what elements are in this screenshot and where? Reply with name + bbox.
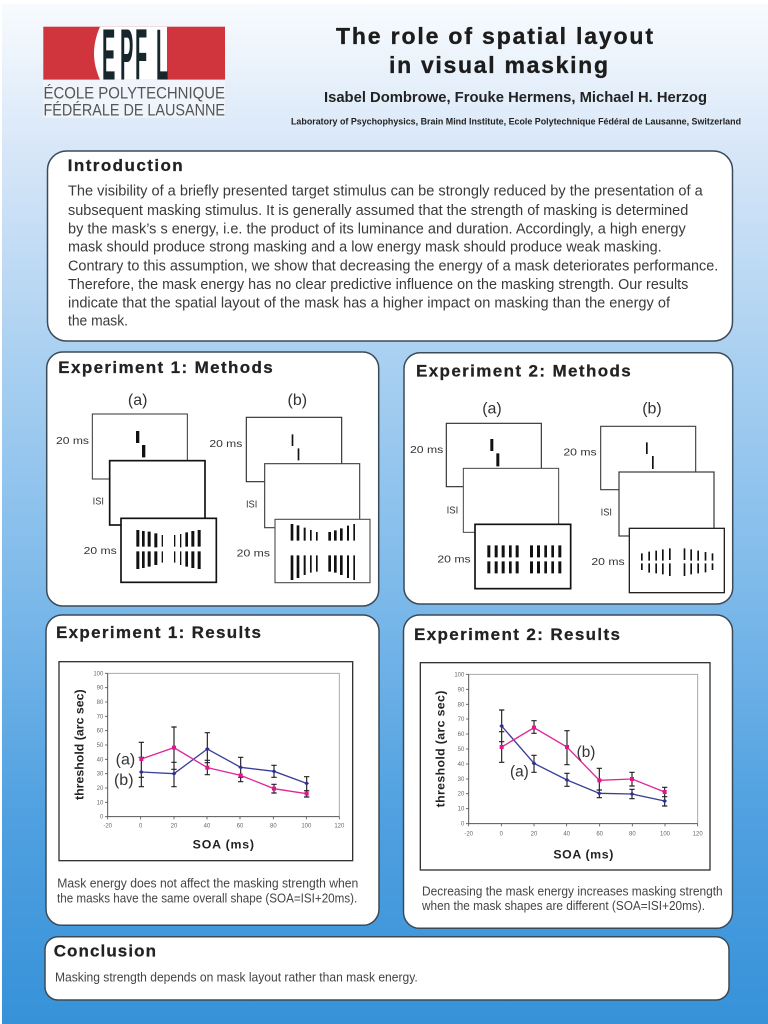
heading: experiment 1 results: Experiment 1: Results <box>56 623 261 642</box>
stimulus sequence (a): 20 ms <box>84 546 117 557</box>
line chart: experiment 1 threshold by SOA: 70 <box>97 714 104 720</box>
line chart: experiment 2 threshold by SOA: 120 <box>693 831 703 837</box>
text: introduction body: the mask. <box>68 314 128 330</box>
line chart: experiment 2 threshold by SOA: 20 <box>531 831 538 837</box>
authors: Isabel Dombrowe, Frouke Hermens, Michael H. Herzog <box>324 90 707 106</box>
diagram: experiment 1 stimuli sequences <box>56 392 370 583</box>
text: introduction body: Therefore, the mask energy has no clear predictive influence on the masking strength. Our results <box>68 277 688 293</box>
caption: experiment 1 results: the masks have the same overall shape (SOA=ISI+20ms). <box>57 891 357 905</box>
text: introduction body: by the mask’s s energy, i.e. the product of its luminance and duration. Accordingly, a high energy <box>68 221 686 237</box>
line chart: experiment 1 threshold by SOA: threshold (arc sec) <box>73 689 87 800</box>
stimulus sequence (b): 20 ms <box>237 549 270 560</box>
heading: experiment 2 results: Experiment 2: Results <box>414 625 620 644</box>
panel: experiment 1 results <box>46 615 379 925</box>
error bars <box>139 727 309 797</box>
line chart: experiment 1 threshold by SOA: 40 <box>97 757 104 763</box>
heading: experiment 2 methods: Experiment 2: Methods <box>416 362 631 381</box>
line chart: experiment 2 threshold by SOA: 40 <box>458 762 465 768</box>
line chart: experiment 2 threshold by SOA: 70 <box>458 717 465 723</box>
stimulus sequence (b) <box>209 392 370 583</box>
stimulus sequence (b): 20 ms <box>209 439 242 450</box>
stimulus sequence (a) <box>410 400 571 589</box>
title: in visual masking <box>389 52 608 78</box>
line chart: experiment 2 threshold by SOA: 60 <box>596 831 604 837</box>
line chart: experiment 2 threshold by SOA: 100 <box>660 831 671 837</box>
stimulus sequence (b): (b) <box>642 400 662 417</box>
line chart: experiment 1 threshold by SOA: 90 <box>97 686 104 692</box>
series (a) pink <box>139 746 309 796</box>
line chart: experiment 1 threshold by SOA: 20 <box>171 823 178 829</box>
diagram: experiment 2 stimuli sequences <box>410 400 724 593</box>
line chart: experiment 2 threshold by SOA: 40 <box>563 831 571 837</box>
stimulus sequence (b): 20 ms <box>563 447 597 458</box>
caption: experiment 1 results: Mask energy does not affect the masking strength when <box>57 876 358 890</box>
caption: experiment 2 results: when the mask shapes are different (SOA=ISI+20ms). <box>421 899 705 913</box>
logo: EPFL: EPFL <box>102 15 168 96</box>
panel: experiment 2 methods <box>404 353 733 604</box>
line chart: experiment 1 threshold by SOA: 0 <box>139 823 143 829</box>
line chart: experiment 1 threshold by SOA: 50 <box>97 743 104 749</box>
text: introduction body: indicate that the spatial layout of the mask has a higher impact on masking than the energy of <box>68 295 671 311</box>
stimulus sequence (a): 20 ms <box>56 436 89 447</box>
panel: experiment 1 methods <box>47 352 379 606</box>
text: introduction body <box>68 184 718 330</box>
caption: experiment 1 results <box>57 876 358 905</box>
stimulus sequence (b): ISI <box>601 508 612 519</box>
line chart: experiment 1 threshold by SOA: 80 <box>97 700 104 706</box>
line chart: experiment 1 threshold by SOA: 0 <box>100 815 104 821</box>
line chart: experiment 1 threshold by SOA: 80 <box>270 823 277 829</box>
panel: introduction <box>48 151 732 341</box>
series (b) blue <box>139 747 309 786</box>
line chart: experiment 1 threshold by SOA: SOA (ms) <box>193 837 254 851</box>
line chart: experiment 2 threshold by SOA: (a) <box>510 763 529 780</box>
line chart: experiment 2 threshold by SOA: 10 <box>458 807 465 813</box>
line chart: experiment 2 threshold by SOA: 50 <box>458 747 465 753</box>
line chart: experiment 1 threshold by SOA: 20 <box>97 786 104 792</box>
affiliation: Laboratory of Psychophysics, Brain Mind Institute, Ecole Polytechnique Fédéral de Lausanne, Switzerland <box>291 116 741 126</box>
line chart: experiment 2 threshold by SOA: 80 <box>629 831 636 837</box>
line chart: experiment 1 threshold by SOA: 40 <box>204 823 211 829</box>
stimulus sequence (a) <box>56 392 216 582</box>
logo: EPFL: FÉDÉRALE DE LAUSANNE <box>44 100 225 119</box>
text: conclusion body: Masking strength depends on mask layout rather than mask energy. <box>55 971 418 985</box>
line chart: experiment 1 threshold by SOA <box>59 662 353 861</box>
stimulus sequence (a): (a) <box>128 392 147 409</box>
stimulus sequence (b): (b) <box>288 392 307 409</box>
line chart: experiment 2 threshold by SOA: 100 <box>454 672 465 678</box>
line chart: experiment 1 threshold by SOA: 60 <box>237 823 244 829</box>
line chart: experiment 1 threshold by SOA: 60 <box>97 729 104 735</box>
line chart: experiment 1 threshold by SOA: (b) <box>114 772 134 789</box>
line chart: experiment 1 threshold by SOA: 30 <box>97 772 104 778</box>
line chart: experiment 2 threshold by SOA: 30 <box>458 777 465 783</box>
stimulus sequence (a): 20 ms <box>410 445 443 456</box>
line chart: experiment 2 threshold by SOA <box>420 663 710 870</box>
line chart: experiment 1 threshold by SOA: 120 <box>334 823 345 829</box>
series (b) pink <box>500 726 667 794</box>
line chart: experiment 2 threshold by SOA: threshold (arc sec) <box>434 691 448 807</box>
heading: conclusion: Conclusion <box>54 942 156 961</box>
caption: experiment 2 results: Decreasing the mask energy increases masking strength <box>422 884 723 898</box>
text: introduction body: subsequent masking stimulus. It is generally assumed that the strength of masking is determined <box>68 203 688 219</box>
text: introduction body: Contrary to this assumption, we show that decreasing the energy of a mask deteriorates performance. <box>68 259 718 275</box>
line chart: experiment 2 threshold by SOA: -20 <box>464 831 474 837</box>
line chart: experiment 2 threshold by SOA: 60 <box>458 732 465 738</box>
line chart: experiment 2 threshold by SOA: 80 <box>458 702 465 708</box>
title <box>336 23 653 78</box>
line chart: experiment 1 threshold by SOA: -20 <box>103 823 113 829</box>
stimulus sequence (b) <box>563 400 724 593</box>
line chart: experiment 2 threshold by SOA: 20 <box>458 792 465 798</box>
text: introduction body: The visibility of a briefly presented target stimulus can be strongly reduced by the presentation of a <box>68 184 704 200</box>
error bars <box>499 710 667 806</box>
logo: EPFL: ÉCOLE POLYTECHNIQUE <box>44 83 225 102</box>
line chart: experiment 2 threshold by SOA: 0 <box>500 831 504 837</box>
series (a) blue <box>499 724 667 803</box>
heading: introduction: Introduction <box>68 156 183 175</box>
logo: EPFL <box>43 15 225 119</box>
panel: conclusion <box>45 937 729 1000</box>
stimulus sequence (b): 20 ms <box>591 557 625 568</box>
panel: experiment 2 results <box>404 615 732 928</box>
heading: experiment 1 methods: Experiment 1: Methods <box>58 358 273 377</box>
stimulus sequence (a): ISI <box>93 496 104 507</box>
text: introduction body: mask should produce strong masking and a low energy mask should produce weak masking. <box>68 240 662 256</box>
line chart: experiment 1 threshold by SOA: (a) <box>116 751 135 768</box>
line chart: experiment 2 threshold by SOA: SOA (ms) <box>553 847 613 861</box>
line chart: experiment 2 threshold by SOA: 0 <box>461 822 465 828</box>
caption: experiment 2 results <box>421 884 723 913</box>
stimulus sequence (a): (a) <box>482 400 502 417</box>
line chart: experiment 2 threshold by SOA: 90 <box>458 687 465 693</box>
title: The role of spatial layout <box>336 23 653 49</box>
stimulus sequence (a): ISI <box>447 505 458 516</box>
line chart: experiment 1 threshold by SOA: 100 <box>93 671 104 677</box>
stimulus sequence (b): ISI <box>246 499 257 510</box>
stimulus sequence (a): 20 ms <box>437 554 471 565</box>
line chart: experiment 2 threshold by SOA: (b) <box>577 744 595 761</box>
line chart: experiment 1 threshold by SOA: 10 <box>97 800 104 806</box>
line chart: experiment 1 threshold by SOA: 100 <box>301 823 312 829</box>
